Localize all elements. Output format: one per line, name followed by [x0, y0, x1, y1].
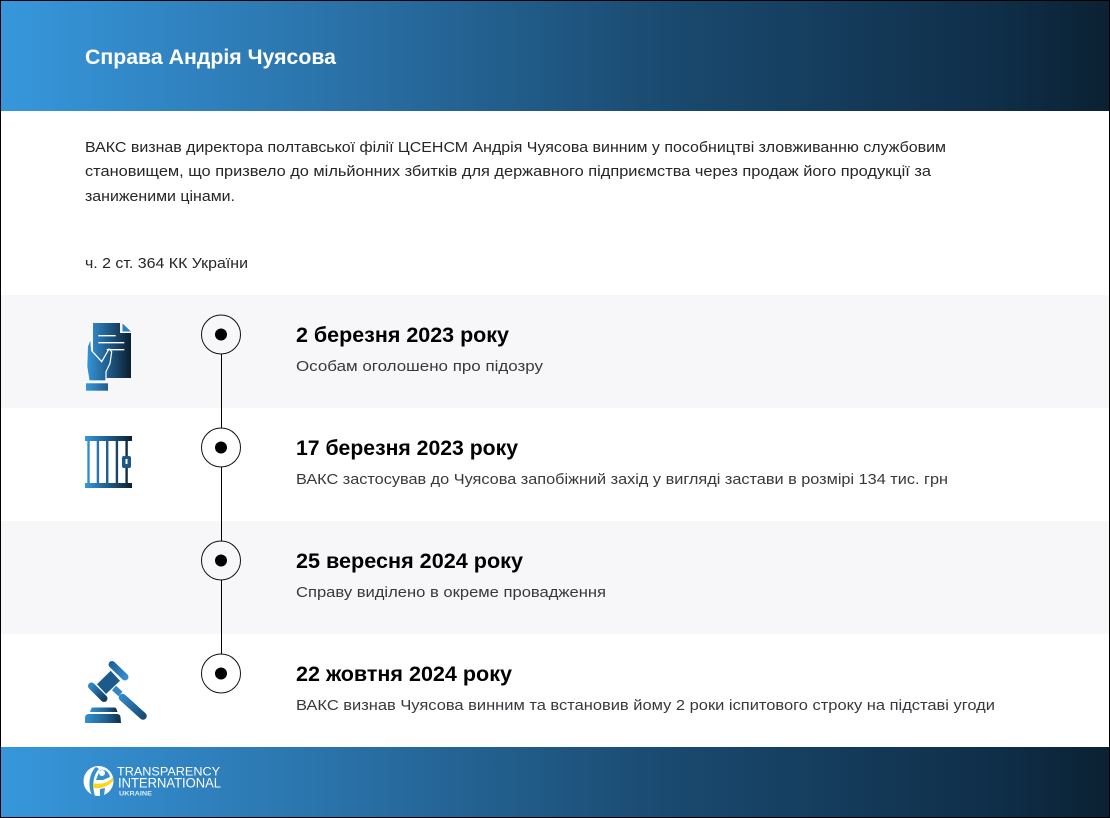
event 1: Особам оголошено про підозру: [296, 358, 544, 375]
icon: prison bars: [85, 436, 132, 488]
event 2: 17 березня 2023 року: [296, 437, 518, 460]
event 4: 22 жовтня 2024 року: [296, 663, 512, 686]
footer band: [1, 747, 1109, 817]
intro paragraph: заниженими цінами.: [85, 188, 235, 205]
event 2: ВАКС застосував до Чуясова запобіжний захід у вигляді застави в розмірі 134 тис. грн: [296, 471, 948, 488]
marker 3: [202, 541, 240, 580]
event 3: 25 вересня 2024 року: [296, 550, 523, 573]
event 1: 2 березня 2023 року: [296, 324, 509, 347]
intro paragraph: ВАКС визнав директора полтавської філії ЦСЕНСМ Андрія Чуясова винним у пособництві зловживанню службовим: [85, 139, 946, 156]
title: Справа Андрія Чуясова: [85, 46, 336, 69]
logo: Transparency International Ukraine: [84, 766, 221, 798]
event 3: Справу виділено в окреме провадження: [296, 584, 606, 601]
header band: [1, 1, 1109, 111]
event 2: [296, 437, 948, 488]
event 1: [296, 324, 544, 375]
event 4: ВАКС визнав Чуясова винним та встановив йому 2 роки іспитового строку на підставі угоди: [296, 697, 995, 714]
icon: gavel: [85, 664, 143, 723]
marker 2: [202, 428, 240, 467]
event 3: [296, 550, 606, 601]
event 4: [296, 663, 995, 714]
logo: Transparency International Ukraine: TRANSPARENCY: [117, 766, 220, 778]
intro paragraph: становищем, що призвело до мільйонних збитків для державного підприємства через продаж його продукції за: [85, 163, 932, 180]
legal article: ч. 2 ст. 364 КК України: [85, 255, 248, 272]
timeline row backgrounds: [1, 295, 1109, 634]
icon: hand holding document: [86, 323, 131, 391]
timeline: [202, 315, 240, 693]
logo: Transparency International Ukraine: UKRAINE: [119, 790, 153, 798]
logo: Transparency International Ukraine: INTERNATIONAL: [118, 776, 221, 790]
intro paragraph: [85, 139, 946, 205]
marker 4: [202, 654, 240, 693]
marker 1: [202, 315, 240, 354]
